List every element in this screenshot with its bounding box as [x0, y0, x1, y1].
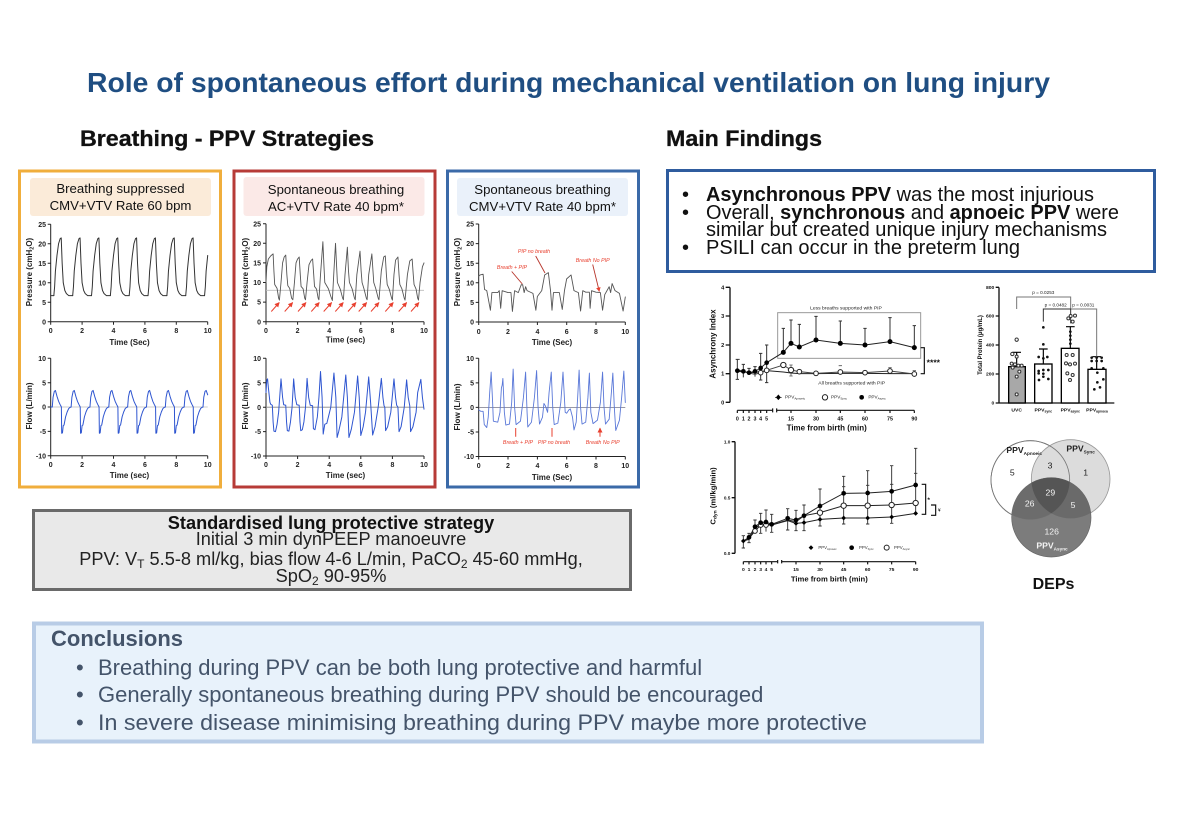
- chart: asynchrony index: 2: [748, 416, 751, 422]
- chart: dynamic compliance: 90: [913, 567, 919, 573]
- chart: dynamic compliance: 3: [759, 567, 762, 573]
- annotations: flow events: [503, 428, 620, 446]
- panel: standardised lung protective strategy: 45-60 mmHg,: [468, 549, 583, 569]
- label: DEPs: DEPs: [1033, 576, 1074, 593]
- flow chart: breathing suppressed: 6: [143, 462, 147, 469]
- pressure chart: breathing suppressed: 10: [204, 328, 212, 335]
- pressure chart: AC+VTV: 5: [257, 300, 261, 307]
- pressure chart: CMV+VTV 40: 10: [466, 280, 474, 287]
- heading: main findings: Main Findings: [666, 126, 822, 151]
- flow chart: AC+VTV: -5: [255, 429, 261, 436]
- pressure chart: CMV+VTV 40: 4: [535, 329, 539, 336]
- annotations: flow events: Breath + PIP: [503, 440, 534, 446]
- panel: spontaneous breathing AC+VTV: [234, 171, 435, 487]
- annotations: pressure events: PIP no breath: [518, 249, 550, 255]
- chart: total protein: 200: [986, 372, 995, 378]
- flow chart: AC+VTV: 0: [257, 405, 261, 412]
- chart: total protein: async: [1071, 409, 1080, 413]
- pressure chart: CMV+VTV 40: Pressure (cmH: [453, 250, 462, 306]
- pressure chart: breathing suppressed: 5: [42, 300, 46, 307]
- venn diagram: DEPs: 29: [1046, 488, 1055, 498]
- header: breathing suppressed: Breathing suppressed: [56, 181, 185, 196]
- chart: total protein: 600: [986, 314, 995, 320]
- pressure chart: AC+VTV: 15: [253, 260, 261, 268]
- chart: dynamic compliance: 60: [865, 567, 871, 573]
- chart: dynamic compliance: Apnoeic: [827, 547, 837, 551]
- chart: dynamic compliance: ¥: [938, 507, 941, 512]
- venn diagram: DEPs: Sync: [1084, 449, 1095, 454]
- chart: asynchrony index: 30: [813, 416, 819, 422]
- flow chart: CMV+VTV 40: -5: [468, 430, 474, 437]
- panel: standardised lung protective strategy: PPV: V: [79, 549, 137, 569]
- findings list: •: [682, 237, 689, 259]
- pressure chart: AC+VTV: 20: [253, 241, 261, 248]
- pressure chart: breathing suppressed: Time (Sec): [109, 338, 150, 347]
- chart: total protein: PPV: [1035, 407, 1045, 413]
- flow chart: breathing suppressed: [25, 356, 212, 480]
- chart: total protein: Total Protein (μg/mL): [978, 315, 984, 375]
- conclusions list: Generally spontaneous breathing during PPV should be encouraged: [98, 682, 763, 707]
- chart: asynchrony index: 4: [721, 285, 725, 291]
- flow chart: AC+VTV: Flow (L/min): [241, 382, 250, 430]
- flow chart: AC+VTV: 4: [327, 462, 331, 469]
- pressure chart: breathing suppressed: 15: [38, 261, 46, 268]
- chart: total protein: PPV: [1086, 407, 1096, 413]
- panel: standardised lung protective strategy: T: [137, 557, 145, 571]
- pressure chart: breathing suppressed: 2: [80, 328, 84, 335]
- venn diagram: DEPs: PPV: [1006, 445, 1024, 455]
- panel: standardised lung protective strategy: 5.5-8 ml/kg, bias flow 4-6 L/min, PaCO: [144, 549, 461, 569]
- pressure chart: breathing suppressed: 2: [30, 247, 36, 250]
- flow chart: CMV+VTV 40: 8: [594, 463, 598, 470]
- panel: standardised lung protective strategy: Standardised lung protective strategy: [168, 513, 495, 533]
- pressure chart: AC+VTV: 10: [420, 328, 428, 335]
- flow chart: CMV+VTV 40: 0: [477, 463, 481, 470]
- pressure chart: CMV+VTV 40: 5: [470, 300, 474, 307]
- pressure chart: CMV+VTV 40: [453, 222, 629, 347]
- annotations: flow events: Breath No PIP: [586, 440, 620, 446]
- pressure chart: breathing suppressed: 25: [38, 222, 46, 229]
- flow chart: CMV+VTV 40: Time (Sec): [532, 473, 572, 482]
- flow chart: breathing suppressed: Flow (L/min): [25, 382, 34, 430]
- chart: dynamic compliance: PPV: [894, 545, 903, 550]
- header: AC+VTV: AC+VTV Rate 40 bpm*: [268, 199, 404, 214]
- chart: asynchrony index: 1: [721, 372, 724, 378]
- conclusions list: •: [76, 710, 84, 735]
- panel: breathing suppressed: [20, 171, 220, 487]
- pressure chart: AC+VTV: 2: [246, 247, 252, 250]
- chart: total protein: 400: [986, 343, 995, 349]
- annotations: flow events: PIP no breath: [538, 440, 570, 446]
- chart: asynchrony index: ****: [927, 357, 941, 367]
- pressure chart: CMV+VTV 40: Time (Sec): [532, 338, 572, 347]
- chart: total protein: sync: [1045, 409, 1052, 413]
- flow chart: breathing suppressed: 2: [80, 462, 84, 469]
- heading: breathing PPV strategies: Breathing - PPV Strategies: [80, 126, 374, 151]
- annotations: pressure events: Breath No PIP: [576, 258, 610, 264]
- chart: asynchrony index: 3: [721, 314, 724, 320]
- panel: standardised lung protective strategy: Initial 3 min dynPEEP manoeuvre: [196, 529, 466, 549]
- pressure chart: breathing suppressed: [25, 222, 212, 347]
- pressure chart: breathing suppressed: 0: [49, 328, 53, 335]
- flow chart: breathing suppressed: 8: [174, 462, 178, 469]
- chart: dynamic compliance: 1.0: [724, 439, 731, 444]
- chart: dynamic compliance: 30: [817, 567, 823, 573]
- flow chart: breathing suppressed: Time (sec): [110, 471, 150, 480]
- flow chart: AC+VTV: 10: [420, 462, 428, 469]
- chart: asynchrony index: 15: [788, 416, 794, 422]
- pressure chart: CMV+VTV 40: 15: [466, 261, 474, 268]
- pressure chart: AC+VTV: 4: [327, 328, 331, 335]
- pressure chart: CMV+VTV 40: 25: [466, 222, 474, 229]
- chart: asynchrony index: 90: [911, 416, 917, 422]
- panel: spontaneous breathing CMV+VTV: [448, 171, 638, 487]
- pressure chart: CMV+VTV 40: 0: [477, 329, 481, 336]
- chart: total protein: 0: [992, 401, 995, 407]
- header: AC+VTV: Spontaneous breathing: [268, 182, 404, 197]
- chart: dynamic compliance: 1: [748, 567, 751, 573]
- chart: total protein: p = 0.0482: [1045, 302, 1067, 307]
- flow chart: breathing suppressed: -10: [36, 453, 46, 460]
- venn diagram: DEPs: Apnoeic: [1024, 451, 1042, 456]
- chart: asynchrony index: 5: [765, 416, 768, 422]
- header: CMV+VTV 40: [457, 178, 628, 216]
- panel: standardised lung protective strategy: 2: [461, 557, 468, 571]
- flow chart: CMV+VTV 40: 10: [466, 356, 474, 363]
- venn diagram: DEPs: 5: [1071, 500, 1076, 510]
- chart: dynamic compliance: (ml/kg/min): [708, 467, 717, 510]
- chart: dynamic compliance: Async: [903, 547, 911, 551]
- flow chart: breathing suppressed: 0: [42, 405, 46, 412]
- pressure chart: breathing suppressed: 0: [42, 319, 46, 326]
- pressure chart: breathing suppressed: O): [25, 237, 34, 247]
- chart: asynchrony index: Apnoeic: [794, 397, 806, 401]
- flow chart: breathing suppressed: 0: [49, 462, 53, 469]
- flow chart: CMV+VTV 40: [453, 356, 629, 482]
- title: Role of spontaneous effort during mechanical ventilation on lung injury: [87, 67, 1051, 98]
- pressure chart: CMV+VTV 40: 2: [458, 247, 464, 250]
- flow chart: breathing suppressed: 10: [38, 356, 46, 363]
- chart: asynchrony index: All breaths supported with PIP: [818, 380, 886, 386]
- chart: asynchrony index: 0: [736, 416, 739, 422]
- chart: total protein: 800: [986, 285, 995, 291]
- chart: total protein: apnoea: [1096, 409, 1108, 413]
- chart: asynchrony index: Less breaths supported with PIP: [810, 305, 883, 311]
- flow chart: CMV+VTV 40: 0: [470, 405, 474, 412]
- findings list: similar but created unique injury mechanisms: [706, 219, 1107, 241]
- pressure chart: CMV+VTV 40: 8: [594, 329, 598, 336]
- chart: dynamic compliance: 0.5: [724, 495, 731, 500]
- pressure chart: breathing suppressed: 20: [38, 241, 46, 248]
- chart: asynchrony index: Asynchrony Index: [708, 309, 717, 379]
- chart: asynchrony index: 75: [887, 416, 893, 422]
- flow chart: AC+VTV: 2: [296, 462, 300, 469]
- flow chart: breathing suppressed: 4: [112, 462, 116, 469]
- chart: asynchrony index: [708, 285, 941, 433]
- flow chart: CMV+VTV 40: Flow (L/min): [453, 383, 462, 431]
- pressure chart: AC+VTV: 2: [296, 328, 300, 335]
- flow chart: CMV+VTV 40: 5: [470, 380, 474, 388]
- chart: dynamic compliance: PPV: [859, 545, 868, 550]
- findings list: PSILI can occur in the preterm lung: [706, 237, 1020, 259]
- pressure chart: CMV+VTV 40: 10: [621, 329, 629, 336]
- chart: asynchrony index: 60: [862, 416, 868, 422]
- venn diagram: DEPs: PPV: [1036, 540, 1054, 550]
- chart: total protein: p = 0.0253: [1032, 290, 1055, 295]
- chart: dynamic compliance: 5: [770, 567, 773, 573]
- chart: asynchrony index: 1: [742, 416, 745, 422]
- pressure chart: AC+VTV: O): [241, 237, 250, 247]
- chart: dynamic compliance: C: [708, 519, 717, 525]
- flow chart: AC+VTV: 10: [253, 356, 261, 363]
- venn diagram: DEPs: [991, 440, 1110, 557]
- chart: dynamic compliance: 4: [765, 567, 768, 573]
- header: CMV+VTV 40: Spontaneous breathing: [474, 182, 611, 197]
- chart: total protein: p = 0.0031: [1072, 302, 1095, 307]
- flow chart: AC+VTV: 8: [390, 462, 394, 469]
- chart: asynchrony index: 45: [837, 416, 843, 422]
- flow chart: CMV+VTV 40: 4: [535, 463, 539, 470]
- flow chart: AC+VTV: [241, 356, 428, 480]
- pressure chart: CMV+VTV 40: 6: [565, 329, 569, 336]
- chart: dynamic compliance: 45: [841, 567, 847, 573]
- panel: standardised lung protective strategy: 90-95%: [319, 566, 386, 586]
- conclusions list: •: [76, 682, 84, 707]
- header: breathing suppressed: CMV+VTV Rate 60 bpm: [50, 198, 191, 213]
- chart: asynchrony index: Async: [878, 397, 886, 401]
- flow chart: AC+VTV: 6: [359, 462, 363, 469]
- findings list: [682, 184, 1119, 259]
- red arrows: spontaneous breaths: [271, 302, 419, 312]
- chart: dynamic compliance: Sync: [868, 547, 874, 551]
- chart: total protein: UVC: [1011, 407, 1022, 413]
- annotations: pressure events: [497, 249, 610, 292]
- panel: standardised lung protective strategy: SpO: [276, 566, 312, 586]
- header: AC+VTV: [244, 177, 424, 216]
- findings list: Asynchronous PPV was the most injurious: [706, 184, 1094, 206]
- chart: total protein: PPV: [1061, 407, 1071, 413]
- flow chart: breathing suppressed: -5: [40, 429, 46, 436]
- chart: asynchrony index: PPV: [831, 395, 840, 400]
- pressure chart: AC+VTV: Pressure (cmH: [241, 250, 250, 306]
- chart: dynamic compliance: *: [927, 497, 930, 504]
- pressure chart: AC+VTV: Time (sec): [326, 336, 366, 344]
- pressure chart: CMV+VTV 40: O): [453, 237, 462, 247]
- chart: asynchrony index: 3: [754, 416, 757, 422]
- pressure chart: breathing suppressed: 4: [112, 328, 116, 335]
- chart: asynchrony index: 4: [759, 416, 762, 422]
- venn diagram: DEPs: 1: [1083, 467, 1088, 477]
- pressure chart: AC+VTV: 8: [390, 328, 394, 335]
- chart: asynchrony index: PPV: [868, 395, 878, 400]
- header: breathing suppressed: [30, 178, 211, 216]
- chart: dynamic compliance: dyn: [713, 510, 719, 519]
- chart: dynamic compliance: 15: [793, 567, 799, 573]
- flow chart: CMV+VTV 40: -10: [464, 454, 474, 461]
- chart: dynamic compliance: PPV: [818, 545, 827, 550]
- venn diagram: DEPs: PPV: [1066, 443, 1084, 453]
- flow chart: CMV+VTV 40: 6: [565, 463, 569, 470]
- pressure chart: AC+VTV: 25: [253, 221, 261, 228]
- findings list: Overall, synchronous and apnoeic PPV were: [706, 202, 1119, 224]
- venn diagram: DEPs: 26: [1025, 499, 1035, 509]
- flow chart: AC+VTV: Time (sec): [326, 471, 366, 480]
- flow chart: breathing suppressed: 5: [42, 380, 46, 387]
- flow chart: AC+VTV: 0: [264, 462, 268, 469]
- pressure chart: AC+VTV: [241, 221, 428, 344]
- conclusions heading: Conclusions: [51, 626, 183, 651]
- conclusions list: [76, 655, 867, 735]
- flow chart: AC+VTV: -10: [251, 454, 261, 461]
- chart: asynchrony index: PPV: [785, 395, 794, 400]
- pressure chart: AC+VTV: 10: [253, 280, 261, 287]
- conclusions list: In severe disease minimising breathing during PPV maybe more protective: [98, 710, 867, 735]
- pressure chart: breathing suppressed: 10: [38, 280, 46, 287]
- venn diagram: DEPs: 3: [1048, 461, 1053, 471]
- flow chart: CMV+VTV 40: 2: [506, 463, 510, 470]
- chart: asynchrony index: Time from birth (min): [787, 424, 867, 433]
- chart: dynamic compliance: 0: [742, 567, 745, 573]
- panel: standardised lung protective strategy: [34, 510, 630, 590]
- conclusions list: Breathing during PPV can be both lung protective and harmful: [98, 655, 702, 680]
- flow chart: CMV+VTV 40: 10: [621, 463, 629, 470]
- pressure chart: AC+VTV: 0: [257, 319, 261, 326]
- pressure chart: breathing suppressed: Pressure (cmH: [25, 250, 34, 306]
- chart: asynchrony index: 0: [721, 400, 724, 406]
- annotations: pressure events: Breath + PIP: [497, 265, 528, 271]
- pressure chart: CMV+VTV 40: 2: [506, 329, 510, 336]
- chart: total protein: [978, 285, 1114, 413]
- pressure chart: breathing suppressed: 8: [174, 328, 178, 335]
- header: CMV+VTV 40: CMV+VTV Rate 40 bpm*: [469, 199, 616, 214]
- panel: conclusions: [34, 624, 982, 742]
- pressure chart: AC+VTV: 0: [264, 328, 268, 335]
- pressure chart: CMV+VTV 40: 0: [470, 320, 474, 327]
- pressure chart: AC+VTV: 6: [359, 328, 363, 335]
- chart: dynamic compliance: 0.0: [724, 551, 731, 556]
- panel: standardised lung protective strategy: 2: [312, 574, 319, 588]
- venn diagram: DEPs: Async: [1054, 546, 1068, 551]
- chart: asynchrony index: Sync: [840, 397, 847, 401]
- pressure chart: breathing suppressed: 6: [143, 328, 147, 335]
- venn diagram: DEPs: 5: [1010, 468, 1015, 478]
- conclusions list: •: [76, 655, 84, 680]
- pressure chart: CMV+VTV 40: 20: [466, 241, 474, 248]
- flow chart: breathing suppressed: 10: [204, 462, 212, 469]
- findings list: •: [682, 184, 689, 206]
- chart: dynamic compliance: Time from birth (min): [791, 575, 868, 584]
- chart: dynamic compliance: 2: [754, 567, 757, 573]
- panel: main findings: [668, 170, 1154, 272]
- chart: asynchrony index: 2: [721, 343, 724, 349]
- flow chart: AC+VTV: 5: [257, 380, 261, 387]
- findings list: •: [682, 202, 689, 224]
- chart: dynamic compliance: [708, 439, 941, 584]
- venn diagram: DEPs: 126: [1044, 527, 1059, 537]
- chart: dynamic compliance: 75: [889, 567, 895, 573]
